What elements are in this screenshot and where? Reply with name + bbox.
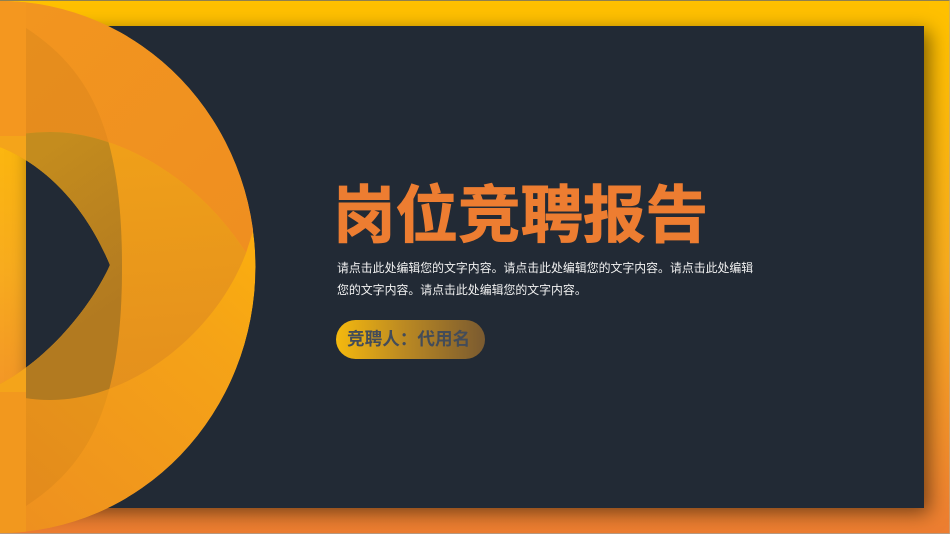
badge text: 竞聘人：代用名 xyxy=(347,329,470,349)
graphic: overlapping orange arcs xyxy=(0,1,256,533)
title: 岗位竞聘报告 xyxy=(333,181,708,251)
right edge line xyxy=(949,0,950,534)
bottom edge line xyxy=(0,533,950,534)
shape: left strip over lens, lighter amber xyxy=(0,130,26,400)
text block: description: 请点击此处编辑您的文字内容。请点击此处编辑您的文字内容。请点击此处编辑 xyxy=(337,261,753,275)
badge: presenter name xyxy=(336,320,485,359)
shape: left strip below, orange xyxy=(0,392,26,534)
shape: lower crescent base xyxy=(26,26,256,532)
text block: description xyxy=(337,261,753,297)
top edge line xyxy=(0,0,950,1)
shape: upper orange crescent xyxy=(0,0,260,253)
shape: dark overlap of arc and lens xyxy=(26,132,122,400)
shape: middle lens xyxy=(26,142,246,388)
shape: left strip above, orange xyxy=(0,0,26,136)
shape: translucent inner arc xyxy=(26,28,109,506)
text block: description: 您的文字内容。请点击此处编辑您的文字内容。 xyxy=(337,283,587,297)
